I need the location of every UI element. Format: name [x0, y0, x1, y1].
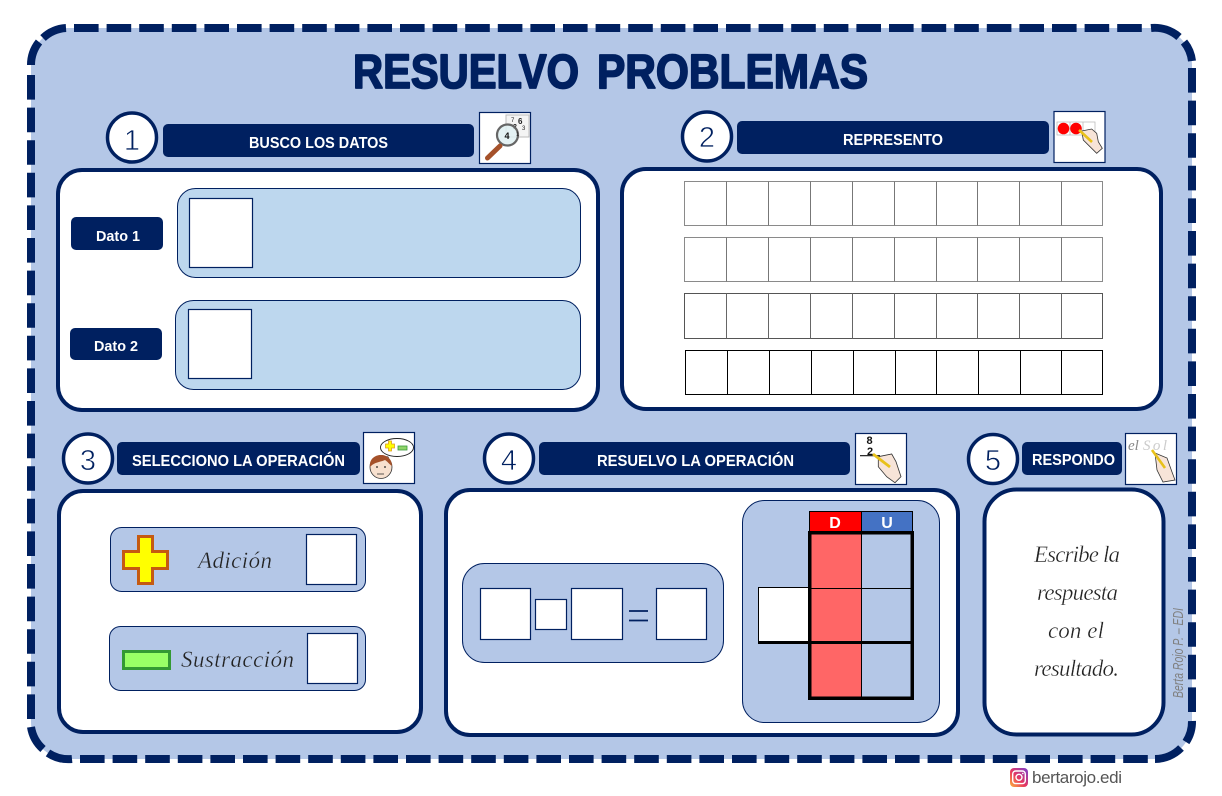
heading: busco los datos: [163, 124, 474, 157]
label: dato 2: Dato 2: [94, 338, 138, 355]
heading: selecciono la operacion: [117, 442, 360, 475]
title: PROBLEMAS: [597, 46, 868, 99]
number 1: 1: [124, 125, 140, 157]
option: adicion: [110, 528, 366, 592]
instagram handle: bertarojo.edi: [1032, 768, 1122, 787]
answer instructions: con el: [1048, 618, 1104, 643]
number 4: 4: [501, 445, 517, 477]
number 5: [968, 434, 1018, 484]
label: dato 1: Dato 1: [96, 228, 140, 245]
icon: minus sign: [124, 652, 170, 668]
number 3: [64, 434, 112, 483]
panel 2: representation grids: [622, 169, 1161, 409]
icon: hand writing a sum: 8: [866, 435, 873, 447]
heading: busco los datos: BUSCO LOS DATOS: [249, 135, 388, 152]
ten-cell grid row 1: [684, 182, 1102, 226]
ten-cell grid row 2: [684, 238, 1102, 282]
header D: [810, 512, 862, 532]
icon: plus sign: [124, 536, 168, 584]
answer instructions: respuesta: [1037, 580, 1118, 605]
heading: respondo: RESPONDO: [1032, 452, 1115, 469]
icon: magnifying glass over numbers: 2: [513, 124, 517, 131]
icon: instagram: [1010, 768, 1028, 787]
ten-cell grid row 4: [686, 350, 1102, 394]
panel 5: answer: [984, 490, 1164, 734]
heading: represento: [737, 121, 1049, 154]
icon: child thinking about operations: [364, 432, 414, 484]
label: dato 1: [71, 217, 163, 250]
icon: magnifying glass over numbers: 6: [518, 117, 523, 126]
option: sustraccion: Sustracción: [181, 647, 294, 672]
title: RESUELVO: [353, 46, 579, 99]
option: adicion: Adición: [196, 548, 272, 573]
step 4 header: [484, 434, 906, 484]
step 5 header: [968, 434, 1176, 484]
heading: resuelvo la operacion: [539, 442, 850, 475]
icon: magnifying glass over numbers: 7: [511, 118, 515, 124]
answer instructions: [1033, 542, 1120, 681]
data box 2: [176, 300, 580, 390]
icon: hand drawing red dots: [1054, 112, 1105, 162]
icon: hand writing el sol: Sol: [1143, 438, 1167, 454]
number 4: [484, 434, 534, 483]
number 5: 5: [985, 445, 1001, 477]
step 2 header: [682, 112, 1105, 162]
icon: magnifying glass over numbers: 3: [522, 126, 526, 132]
header U: [862, 512, 912, 532]
icon: magnifying glass over numbers: 1: [516, 132, 520, 138]
ten-cell grid row 3: [684, 294, 1102, 338]
icon: hand writing a sum: 2: [867, 446, 873, 458]
header D: D: [829, 515, 841, 532]
number 3: 3: [80, 445, 96, 477]
equation boxes: [462, 564, 724, 662]
answer instructions: Escribe la: [1033, 542, 1120, 567]
icon: hand writing el sol: el: [1128, 438, 1139, 454]
step 1 header: [108, 112, 530, 164]
heading: selecciono la operacion: SELECCIONO LA OPERACIÓN: [132, 451, 345, 470]
author credit: Berta Rojo P. – EDI: [1170, 608, 1187, 698]
answer instructions: resultado.: [1034, 656, 1119, 681]
icon: hand writing a sum: [856, 434, 906, 484]
panel 1: data: [58, 170, 598, 410]
icon: magnifying glass over numbers: 4: [504, 131, 510, 141]
panel 3: select operation: [59, 491, 421, 732]
place value table: [742, 500, 940, 722]
number 2: [682, 112, 732, 161]
title: [353, 46, 868, 99]
number 2: 2: [699, 122, 715, 154]
step 3 header: [64, 432, 414, 484]
data box 1: [178, 188, 580, 278]
heading: resuelvo la operacion: RESUELVO LA OPERACIÓN: [597, 451, 794, 470]
panel 4: solve operation: [446, 490, 958, 735]
icon: hand writing el sol: [1126, 434, 1176, 484]
heading: represento: REPRESENTO: [843, 132, 943, 149]
number 1: [108, 113, 156, 162]
label: dato 2: [70, 328, 162, 360]
heading: respondo: [1022, 442, 1122, 475]
icon: magnifying glass over numbers: [480, 112, 530, 164]
option: sustraccion: [110, 626, 366, 690]
header U: U: [881, 515, 893, 532]
